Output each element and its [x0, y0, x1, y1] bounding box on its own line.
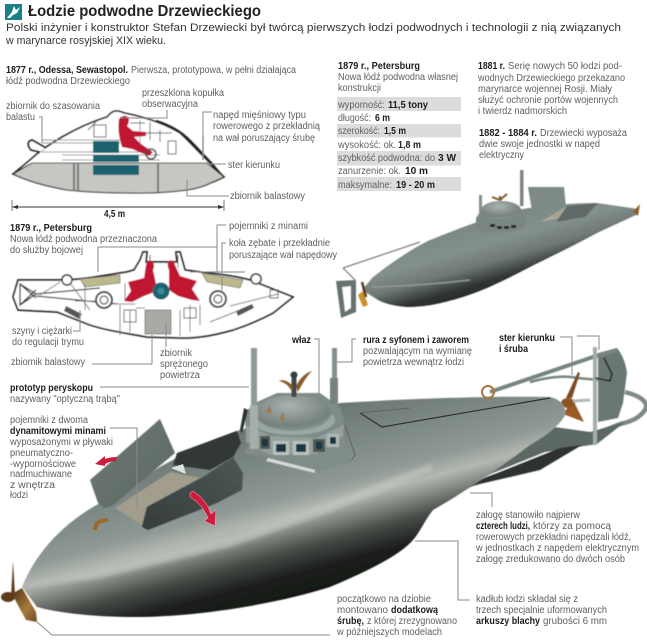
intro text: Polski inżynier i konstruktor Stefan Drzewiecki był twórcą pierwszych łodzi podwodnych i technologii z nią związanych: [6, 22, 621, 34]
label: periscope: prototyp peryskopu: [10, 383, 93, 394]
arrow: red curved arrow: [190, 491, 216, 526]
labels: 1877 diagram: rowerowego z przekładnią: [213, 121, 320, 132]
table: specifications: 11,5 tony: [388, 100, 428, 111]
text block: 1882-1884: Drzewiecki wyposaża: [540, 128, 627, 139]
diagram: 1879 cross-section: [13, 252, 293, 338]
deck hatch lines: [360, 398, 550, 427]
text block: 1881: służyć ochronie portów wojennych: [478, 95, 618, 106]
table: specifications: [337, 97, 461, 191]
dark deck near bow flaps: [173, 431, 241, 470]
text block: 1877 prototype: [6, 65, 296, 87]
text block: 1882-1884: [479, 128, 627, 161]
text block: 1879 specification heading: konstrukcji: [338, 83, 381, 94]
label: rudder and screw: ster kierunku: [499, 333, 555, 344]
label: hatch: właz: [291, 335, 311, 346]
illustration: small submarine: [336, 170, 640, 318]
table: specifications: zanurzenie: ok.: [338, 166, 401, 177]
label: mine containers: pneumatyczno-: [10, 448, 73, 459]
label: hull plating: trzech specjalnie uformowanych: [476, 605, 607, 616]
label: hatch: [291, 335, 319, 395]
label: extra bow screw: montowano: [337, 605, 388, 616]
labels: 1879 diagram: do regulacji trymu: [12, 337, 84, 348]
bow propeller: [1, 561, 37, 622]
table: specifications: długość:: [338, 113, 371, 124]
labels: 1877 diagram: ster kierunku: [228, 160, 280, 171]
label: extra bow screw: początkowo na dziobie: [337, 594, 431, 605]
text block: 1877 prototype: 1877 r., Odessa, Sewastopol.: [6, 65, 128, 76]
hull body: [22, 397, 566, 617]
label: extra bow screw: śrubę,: [337, 616, 364, 627]
label: crew: czterech ludzi,: [476, 521, 530, 532]
labels: 1877 diagram: [6, 88, 320, 202]
illustration: large submarine: [1, 347, 646, 622]
label: mine containers: łodzi: [10, 490, 28, 501]
text block: 1877 prototype: Pierwsza, prototypowa, w pełni działająca: [131, 65, 296, 76]
text block: 1881: [477, 61, 625, 117]
label: crew: załogę zredukowano do dwóch osób: [476, 554, 625, 565]
label: rudder and screw: [499, 333, 599, 375]
flap: left mine container cover: [90, 419, 175, 508]
text block: 1879 combat boat: Nowa łódź podwodna przeznaczona: [10, 234, 157, 245]
labels: 1879 diagram: powietrza: [160, 370, 200, 381]
labels: 1879 diagram: zbiornik: [160, 348, 193, 359]
label: crew: którzy za pomocą: [533, 521, 611, 532]
text block: 1879 combat boat: do służby bojowej: [10, 245, 83, 256]
label: siphon pipe: rura z syfonem i zaworem: [363, 335, 469, 346]
label: crew: załogę stanowiło najpierw: [476, 510, 581, 521]
label: mine containers: nadmuchiwane: [10, 469, 72, 480]
text block: 1879 combat boat: 1879 r., Petersburg: [10, 223, 92, 234]
labels: 1879 diagram: pojemniki z minami: [229, 221, 308, 232]
label: hull plating: kadłub łodzi składał się z: [476, 594, 578, 605]
label: mine containers: wyposażonymi w pływaki: [9, 437, 113, 448]
labels: 1879 diagram: sprężonego: [160, 359, 208, 370]
table: specifications: 1,5 m: [384, 126, 406, 137]
icon: logo square with shark: [5, 4, 22, 20]
label: hull plating: arkuszy blachy: [476, 616, 540, 627]
label: mine containers: z wnętrza: [10, 480, 55, 491]
bronze handle on bow: [95, 520, 108, 530]
labels: 1877 diagram: na wał poruszający śrubę: [213, 133, 315, 144]
diagram: 1877 cross-section: [13, 111, 224, 193]
text block: 1881: 1881 r.: [478, 61, 505, 72]
labels: 1879 diagram: [11, 221, 337, 381]
table: specifications: szerokość:: [338, 126, 380, 137]
open bay mesh: [115, 472, 200, 525]
labels: 1879 diagram: zbiornik balastowy: [11, 357, 85, 368]
labels: 1877 diagram: napęd mięśniowy typu: [213, 110, 306, 121]
intro text: w marynarce rosyjskiej XIX wieku.: [5, 35, 166, 47]
text block: 1881: wodnych Drzewieckiego przekazano: [477, 73, 625, 84]
table: specifications: wyporność:: [337, 100, 385, 111]
dimension: 4,5 m: [12, 200, 224, 220]
text block: 1877 prototype: łódź podwodna Drzewieckiego: [6, 76, 130, 87]
title: Łodzie podwodne Drzewieckiego: [28, 3, 261, 20]
label: crew: [470, 493, 639, 565]
labels: 1877 diagram: obserwacyjna: [142, 99, 198, 110]
label: hull plating: [415, 541, 607, 627]
label: extra bow screw: dodatkową: [391, 605, 438, 616]
label: siphon pipe: pozwalającym na wymianę: [363, 346, 472, 357]
flap: right mine container cover: [142, 457, 243, 530]
labels: 1877 diagram: zbiornik balastowy: [230, 191, 305, 202]
text block: 1879 specification heading: Nowa łódź podwodna własnej: [338, 72, 458, 83]
table: specifications: 19 - 20 m: [396, 180, 435, 191]
bronze ring on stern: [482, 386, 494, 398]
labels: 1877 diagram: przeszklona kopułka: [142, 88, 224, 99]
dimension: 4,5 m: 4,5 m: [104, 209, 125, 220]
label: periscope: nazywany "optyczną trąbą": [10, 394, 120, 405]
label: mine containers: dynamitowymi minami: [10, 426, 106, 437]
text block: 1879 specification heading: [338, 61, 458, 94]
conning tower: [240, 348, 352, 473]
arrow: red left arrow: [95, 456, 117, 466]
label: hull plating: grubości 6 mm: [543, 616, 607, 627]
highlight on hull: [25, 464, 432, 587]
stern frame: [433, 347, 646, 497]
label: extra bow screw: [37, 594, 457, 638]
text block: 1881: Serię nowych 50 łodzi pod-: [508, 61, 622, 72]
label: periscope: [10, 383, 249, 405]
labels: 1877 diagram: balastu: [6, 112, 35, 123]
labels: 1879 diagram: poruszające wał napędowy: [229, 250, 337, 261]
label: crew: rowerowych przekładni napędzali łódź,: [476, 532, 631, 543]
text block: 1879 combat boat: [10, 223, 157, 256]
table: specifications: maksymalne:: [338, 180, 392, 191]
table: specifications: 1,8 m: [398, 140, 421, 151]
labels: 1879 diagram: szyny i ciężarki: [12, 326, 72, 337]
text block: 1882-1884: 1882 - 1884 r.: [479, 128, 537, 139]
label: rudder and screw: i śruba: [499, 344, 528, 355]
label: extra bow screw: z której zrezygnowano: [367, 616, 457, 627]
label: mine containers: pojemniki z dwoma: [10, 415, 88, 426]
label: siphon pipe: [337, 335, 472, 368]
table: specifications: 3 W: [438, 153, 457, 164]
text block: 1881: marynarce wojennej Rosji. Miały: [478, 84, 612, 95]
table: specifications: 10 m: [405, 166, 428, 177]
text block: 1882-1884: elektryczny: [479, 150, 524, 161]
table: specifications: szybkość podwodna: do: [338, 153, 435, 164]
label: siphon pipe: powietrza wewnątrz łodzi: [363, 357, 464, 368]
text block: 1881: i twierdz nadmorskich: [478, 106, 567, 117]
table: specifications: 6 m: [375, 113, 390, 124]
intro text: [5, 22, 621, 47]
label: mine containers: [9, 415, 137, 510]
labels: 1879 diagram: koła zębate i przekładnie: [229, 238, 330, 249]
label: mine containers: -wypornościowe: [10, 459, 76, 470]
table: specifications: wysokość: ok.: [337, 140, 396, 151]
text block: 1882-1884: dwie swoje jednostki w napęd: [479, 139, 600, 150]
label: extra bow screw: w późniejszych modelach: [336, 627, 442, 638]
labels: 1877 diagram: zbiornik do szasowania: [6, 101, 100, 112]
text block: 1879 specification heading: 1879 r., Petersburg: [338, 61, 420, 72]
